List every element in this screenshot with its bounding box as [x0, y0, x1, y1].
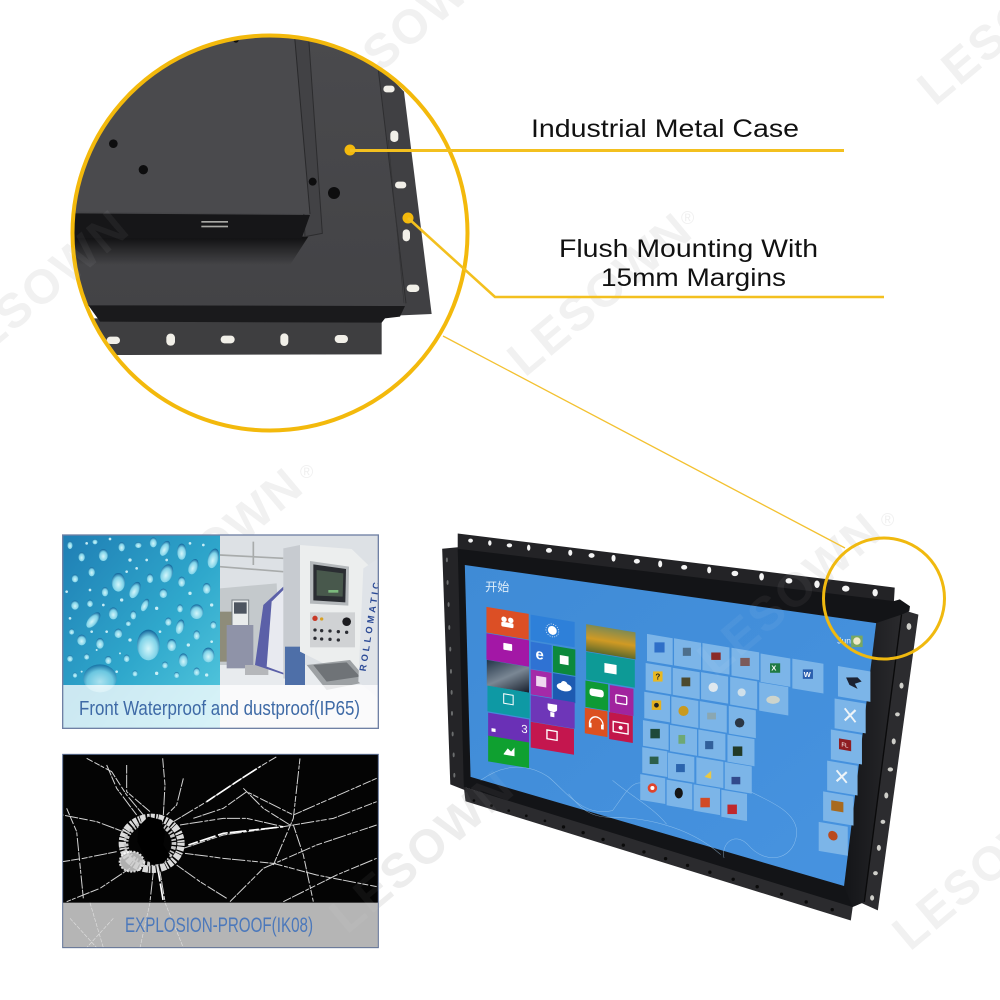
bracket strip [303, 42, 323, 238]
watermark overlay on dark imagery [0, 200, 893, 943]
flange slots [107, 86, 419, 346]
magnified circle: metal case photo [60, 30, 468, 430]
caption band [63, 685, 378, 728]
start title: 开始 [485, 580, 509, 594]
right mounting flange [378, 70, 432, 316]
small highlight circle on monitor corner [824, 538, 944, 659]
frame border [63, 535, 378, 728]
start tiles: coloured group: 3 [521, 723, 528, 736]
start tiles: right-hand group [819, 666, 870, 856]
top flange holes [468, 539, 878, 596]
shadow beneath box [74, 236, 308, 260]
caption: explosion-proof: EXPLOSION-PROOF(IK08) [125, 914, 313, 937]
callout: industrial metal case [344, 115, 844, 156]
start tiles: coloured group: e [535, 646, 544, 664]
left flange holes [446, 558, 455, 778]
impact hole [137, 817, 170, 865]
panel: front waterproof and dustproof [63, 535, 382, 728]
water droplets photo [63, 535, 221, 728]
machine brand lettering: ROLLOMATIC [358, 581, 382, 672]
callout: flush mounting: 15mm Margins [601, 264, 786, 292]
panel: explosion-proof [63, 754, 378, 948]
callout: flush mounting [402, 212, 884, 297]
top flange [458, 534, 895, 604]
wallpaper curves [481, 767, 797, 858]
bottom mounting flange [92, 318, 382, 355]
watermark: LESOWN repeated: LESOWN [688, 503, 893, 686]
start tiles: desktop apps group [640, 634, 823, 821]
connector line from small circle to large circle [443, 336, 845, 548]
impact ring [122, 817, 181, 869]
bezel [458, 549, 910, 907]
watermark overlay on dark imagery: LESOWN [688, 503, 893, 686]
start tiles: coloured group [486, 607, 636, 768]
large circle outline [72, 36, 468, 430]
upper box front face [70, 213, 310, 238]
cracked glass photo [63, 754, 378, 948]
watermark: LESOWN repeated: ® [881, 510, 894, 530]
screen [465, 565, 876, 886]
watermark: LESOWN repeated: ® [681, 208, 694, 228]
user avatar [851, 636, 863, 647]
screw holes [109, 37, 340, 199]
watermark: LESOWN repeated: ® [300, 462, 313, 482]
desktop icons [648, 642, 813, 814]
watermark: LESOWN repeated: LESOWN [498, 203, 703, 386]
user name: Jun [837, 635, 851, 645]
left flange [442, 547, 465, 790]
case underside edge [88, 305, 405, 323]
watermark overlay on dark imagery: LESOWN [320, 760, 525, 943]
USB port [201, 221, 228, 227]
callout: industrial metal case: Industrial Metal Case [531, 115, 799, 143]
desktop icons: ? [655, 673, 660, 682]
factory machine photo [220, 536, 378, 690]
caption: waterproof: Front Waterproof and dustproof(IP65) [79, 697, 360, 720]
frame border [63, 754, 378, 948]
desktop icons: W [804, 670, 811, 679]
main rear case [74, 42, 386, 306]
callout: flush mounting: Flush Mounting With [559, 235, 818, 263]
monitor: open frame display [442, 534, 918, 921]
start tiles: right-hand group: FL [841, 742, 849, 750]
upper box top face [294, 39, 304, 214]
desktop icons: X [771, 664, 776, 673]
right flange holes [870, 623, 911, 901]
watermark: LESOWN repeated: LESOWN [320, 760, 525, 943]
caption band [63, 903, 378, 948]
bottom flange [464, 787, 853, 921]
watermark: LESOWN repeated: LESOWN [109, 458, 314, 641]
bezel right side wall [844, 615, 902, 907]
right flange [859, 609, 918, 910]
bottom flange holes [473, 799, 834, 911]
